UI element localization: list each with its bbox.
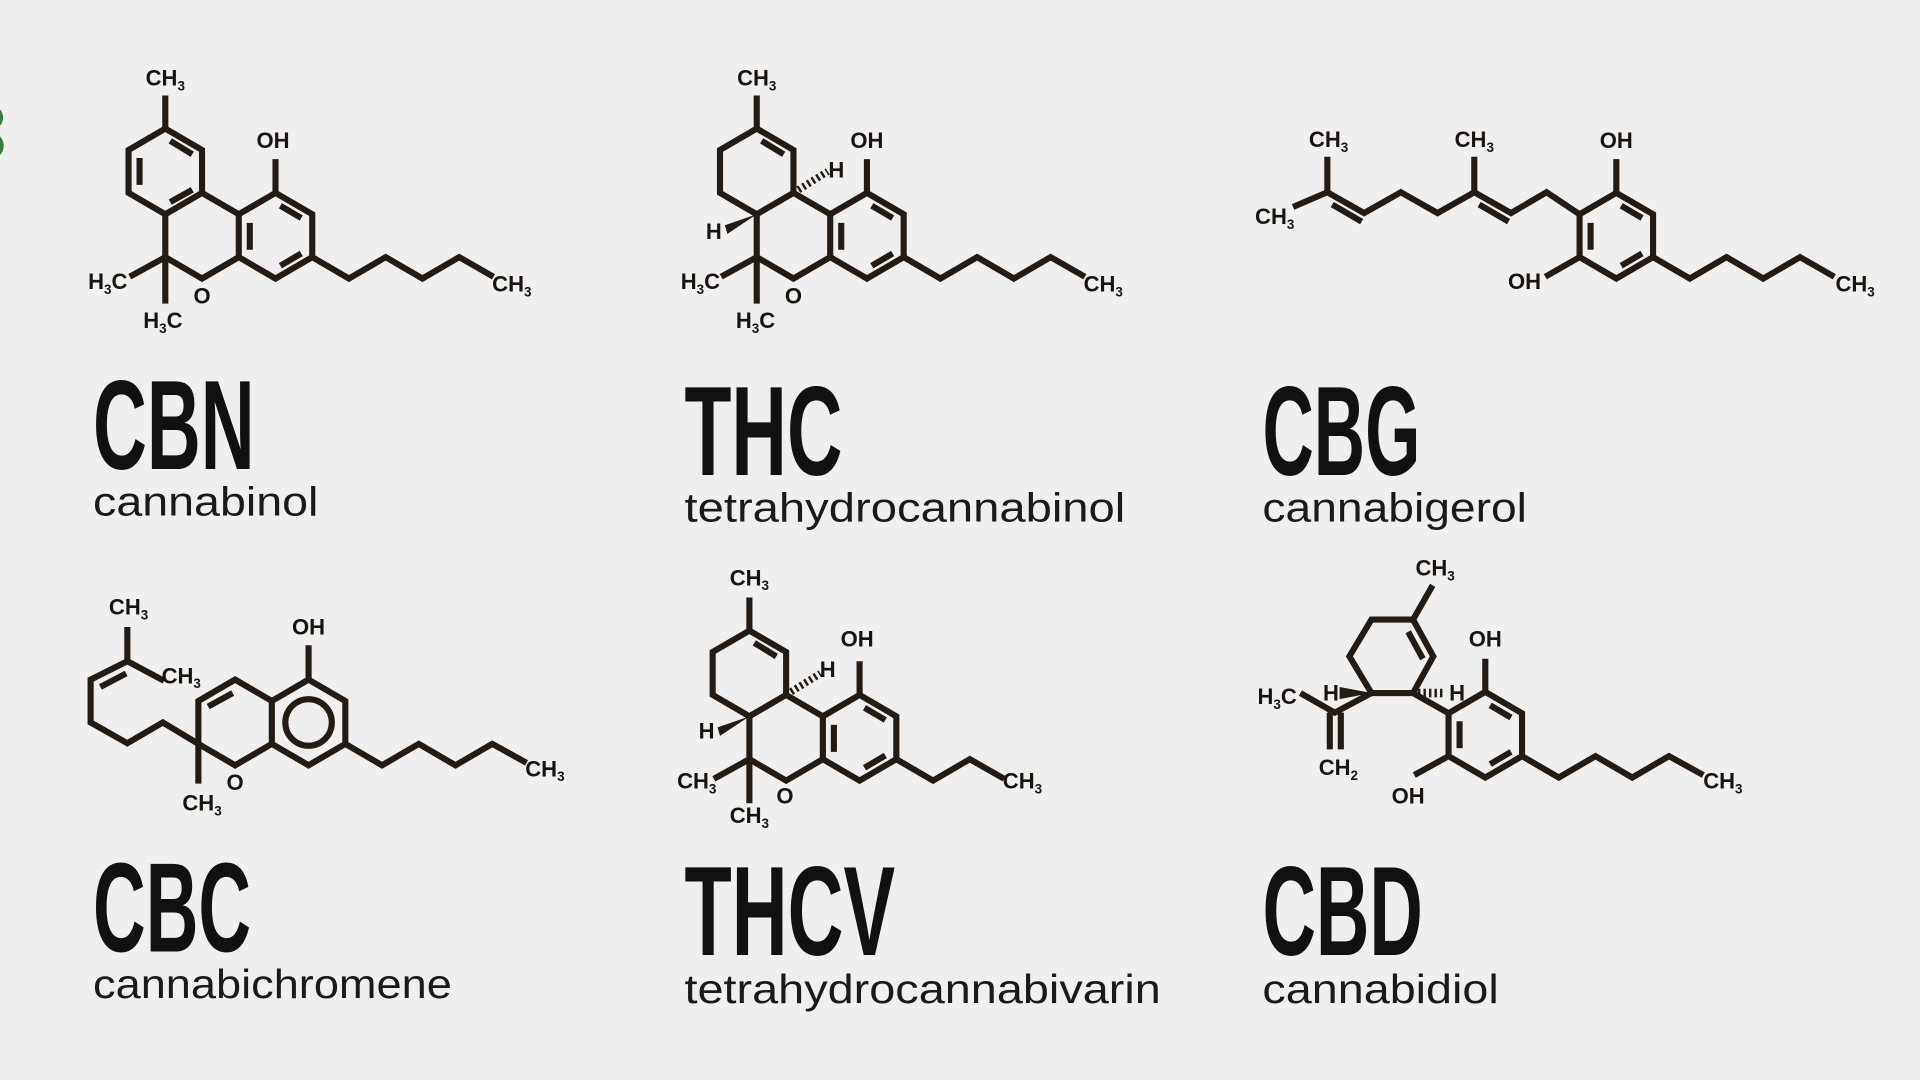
molecule: THC: CH bbox=[737, 66, 769, 91]
title: CBC: CBC bbox=[93, 836, 251, 978]
molecule: THCV: H bbox=[820, 657, 836, 682]
molecule: CBG: 3 bbox=[1287, 217, 1294, 232]
molecule: THCV: 3 bbox=[762, 578, 769, 593]
molecule: CBD: OH bbox=[1469, 627, 1502, 652]
molecule: THCV: OH bbox=[841, 627, 874, 652]
molecule: CBD: 3 bbox=[1273, 697, 1281, 712]
molecule: THC: H bbox=[828, 158, 844, 183]
molecule: THCV: 3 bbox=[709, 781, 716, 796]
molecule: CBD: H bbox=[1449, 680, 1465, 705]
molecule: THC: CH bbox=[1084, 271, 1115, 296]
molecule: CBG: CH bbox=[1309, 127, 1341, 152]
subtitle: cannabinol: cannabinol bbox=[93, 479, 318, 525]
molecule: CBG: 3 bbox=[1341, 140, 1348, 155]
molecule: CBN: C bbox=[167, 308, 183, 333]
molecule: CBN: C bbox=[111, 269, 127, 294]
molecule: CBD: CH bbox=[1415, 556, 1447, 581]
molecule: CBC: 3 bbox=[557, 769, 565, 784]
molecule: THCV: 3 bbox=[762, 816, 769, 831]
molecule: THCV: CH bbox=[730, 565, 762, 590]
molecule: CBG: 3 bbox=[1486, 140, 1494, 155]
molecule: CBC: CH bbox=[182, 791, 214, 816]
molecule: THCV: CH bbox=[1003, 769, 1035, 794]
subtitle: cannabigerol: cannabigerol bbox=[1262, 485, 1527, 531]
molecule: CBG: OH bbox=[1508, 269, 1541, 294]
title: CBD: CBD bbox=[1262, 840, 1423, 982]
molecule: CBD bbox=[1257, 556, 1743, 808]
decorative green edge mark bbox=[0, 108, 1, 154]
molecule: THC: OH bbox=[850, 128, 883, 153]
molecule: THC: H bbox=[706, 219, 722, 244]
molecule: CBD: 3 bbox=[1735, 781, 1743, 796]
subtitle: cannabidiol: cannabidiol bbox=[1262, 966, 1499, 1012]
molecule: CBC: CH bbox=[525, 756, 557, 781]
molecule: THCV: CH bbox=[730, 803, 762, 828]
molecule: THC: H bbox=[736, 308, 752, 333]
molecule: CBC: 3 bbox=[214, 804, 222, 819]
molecule: CBD: 2 bbox=[1351, 768, 1358, 783]
molecule: THCV: CH bbox=[677, 769, 709, 794]
molecule: THC bbox=[681, 66, 1123, 336]
title: CBN: CBN bbox=[93, 354, 255, 496]
molecule: CBN: 3 bbox=[177, 79, 185, 94]
molecule: THCV bbox=[677, 565, 1042, 831]
molecule: THCV: 3 bbox=[1035, 781, 1042, 796]
molecule: THCV: O bbox=[776, 783, 793, 808]
molecule: THC: 3 bbox=[697, 282, 704, 297]
molecule: CBN: OH bbox=[257, 128, 290, 153]
molecule: THC: O bbox=[785, 284, 802, 309]
molecule: THC: 3 bbox=[1115, 284, 1123, 299]
molecule: CBD: C bbox=[1281, 684, 1297, 709]
molecule: THC: 3 bbox=[752, 321, 759, 336]
molecule: CBC: OH bbox=[292, 614, 325, 639]
molecule: CBN: CH bbox=[146, 66, 177, 91]
molecule: CBN: 3 bbox=[104, 282, 111, 297]
molecule: CBD: H bbox=[1257, 684, 1273, 709]
subtitle: tetrahydrocannabivarin: tetrahydrocannabivarin bbox=[684, 966, 1161, 1012]
molecule: CBG: 3 bbox=[1867, 284, 1875, 299]
molecule: CBN: O bbox=[193, 284, 211, 309]
molecule: CBG: OH bbox=[1600, 128, 1633, 153]
title: THC: THC bbox=[684, 360, 842, 502]
molecule: CBD: 3 bbox=[1447, 568, 1455, 583]
molecule: CBD: CH bbox=[1319, 755, 1351, 780]
molecule: CBG: CH bbox=[1455, 127, 1486, 152]
molecule: CBC bbox=[91, 595, 565, 819]
molecule: CBD: OH bbox=[1392, 783, 1425, 808]
molecule: THC: H bbox=[681, 269, 697, 294]
molecule: CBG: CH bbox=[1255, 204, 1287, 229]
molecule: CBD: CH bbox=[1703, 769, 1735, 794]
molecule: CBN: 3 bbox=[159, 321, 167, 336]
molecule: CBC: 3 bbox=[193, 676, 201, 691]
molecule: CBC: O bbox=[227, 770, 244, 795]
molecule: CBC: CH bbox=[162, 663, 193, 688]
molecule: THC: 3 bbox=[769, 79, 776, 94]
subtitle: cannabichromene: cannabichromene bbox=[93, 961, 452, 1007]
molecule: CBD: H bbox=[1323, 680, 1339, 705]
molecule: CBG: CH bbox=[1835, 271, 1867, 296]
title: CBG: CBG bbox=[1262, 360, 1420, 502]
molecule: CBC: CH bbox=[109, 595, 141, 620]
molecule: CBN: H bbox=[143, 308, 159, 333]
molecule: CBN: CH bbox=[492, 271, 524, 296]
molecule: CBG bbox=[1255, 127, 1875, 299]
molecule: THC: C bbox=[704, 269, 720, 294]
molecule: THC: C bbox=[759, 308, 775, 333]
molecule: CBN: 3 bbox=[524, 284, 531, 299]
molecule: CBC: 3 bbox=[141, 608, 148, 623]
subtitle: tetrahydrocannabinol: tetrahydrocannabinol bbox=[684, 485, 1125, 531]
molecule: CBN: H bbox=[88, 269, 104, 294]
title: THCV: THCV bbox=[684, 840, 895, 982]
molecule: THCV: H bbox=[699, 718, 714, 743]
molecule: CBN bbox=[88, 66, 531, 336]
